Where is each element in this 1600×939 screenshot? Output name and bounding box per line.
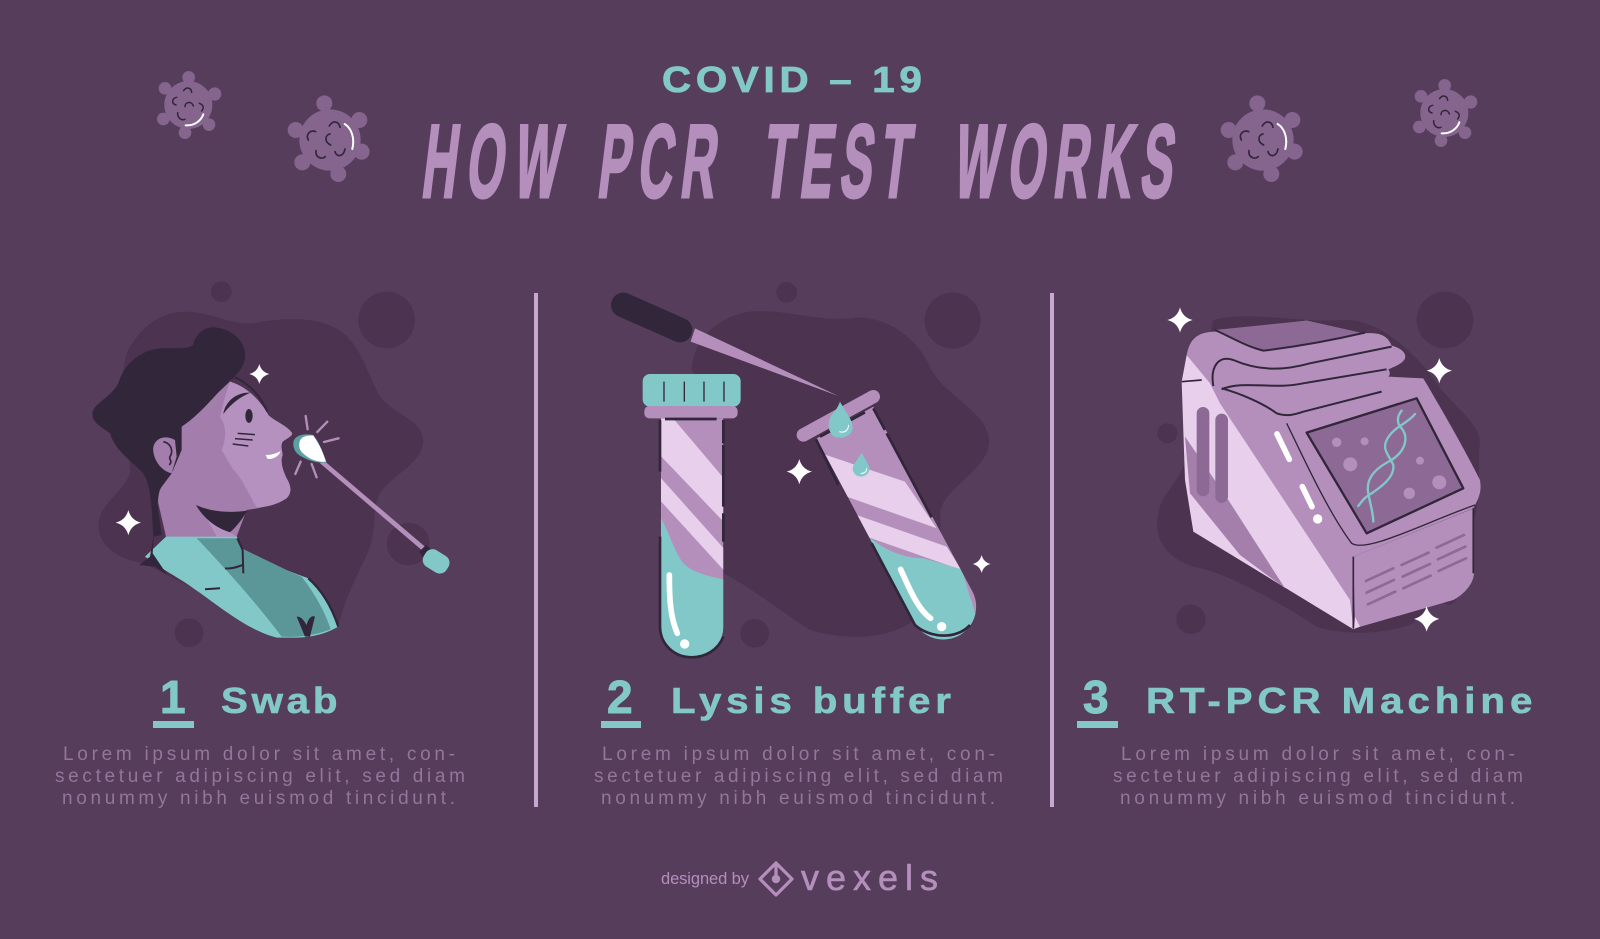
- step number 1: 1: [160, 671, 186, 723]
- icon: large virus left: [288, 95, 370, 182]
- background blob: [692, 282, 989, 648]
- title: WORKS: [949, 104, 1182, 220]
- step heading: Lysis buffer: Lysis buffer: [671, 681, 951, 721]
- panel: swab illustration: [92, 281, 453, 647]
- step number 3: 3: [1083, 671, 1109, 723]
- step description: nonummy nibh euismod tincidunt.: [62, 788, 455, 809]
- divider left: [534, 293, 538, 807]
- title: PCR: [593, 104, 725, 220]
- icon: liquid drops: [829, 402, 869, 477]
- step number 2: 2: [607, 671, 633, 723]
- footer brand: vexels: [801, 857, 938, 898]
- step heading: Swab: Swab: [221, 681, 337, 721]
- divider right: [1050, 293, 1054, 807]
- step description: [1113, 744, 1523, 809]
- step 2 text: [594, 671, 1003, 809]
- step heading: RT-PCR Machine: RT-PCR Machine: [1146, 681, 1532, 721]
- step description: Lorem ipsum dolor sit amet, con-: [602, 744, 995, 765]
- step description: nonummy nibh euismod tincidunt.: [1120, 788, 1515, 809]
- icon: small virus left: [157, 71, 221, 139]
- background blob: [1157, 292, 1480, 634]
- panel: RT-PCR machine illustration: [1157, 292, 1481, 634]
- title: [417, 104, 1182, 220]
- step description: [594, 744, 1003, 809]
- footer brand: [661, 857, 938, 898]
- title: TEST: [758, 104, 919, 220]
- footer brand: designed by: [661, 870, 750, 888]
- step 3 text: [1077, 671, 1532, 809]
- subtitle: COVID – 19: [662, 60, 922, 100]
- title: HOW: [417, 104, 569, 220]
- step description: sectetuer adipiscing elit, sed diam: [1113, 766, 1523, 787]
- icon: DNA helix on screen: [1358, 411, 1415, 522]
- icons: sparkles: [1167, 307, 1452, 632]
- icons: sparkles: [787, 459, 991, 573]
- icon: vexels diamond: [760, 863, 792, 895]
- panel: lysis buffer illustration: [623, 282, 991, 660]
- step number 3: [1077, 671, 1118, 728]
- icons: sparkles: [116, 364, 269, 535]
- step description: Lorem ipsum dolor sit amet, con-: [1121, 744, 1515, 765]
- icon: pipette: [623, 305, 838, 396]
- icon: large virus right: [1221, 95, 1303, 182]
- step description: sectetuer adipiscing elit, sed diam: [55, 766, 465, 787]
- background blob: [98, 281, 430, 647]
- step number 1: [153, 671, 194, 728]
- step description: Lorem ipsum dolor sit amet, con-: [63, 744, 455, 765]
- step description: [55, 744, 465, 809]
- step description: nonummy nibh euismod tincidunt.: [601, 788, 995, 809]
- step 1 text: [55, 671, 465, 809]
- icon: nasal swab: [293, 416, 453, 577]
- step number 2: [601, 671, 641, 728]
- header: [417, 60, 1182, 220]
- icon: PCR machine: [1182, 321, 1481, 629]
- person: [92, 327, 338, 638]
- icon: upright test tube: [643, 374, 741, 660]
- step description: sectetuer adipiscing elit, sed diam: [594, 766, 1003, 787]
- icon: tilted test tube: [803, 397, 983, 640]
- icon: small virus right: [1413, 79, 1477, 147]
